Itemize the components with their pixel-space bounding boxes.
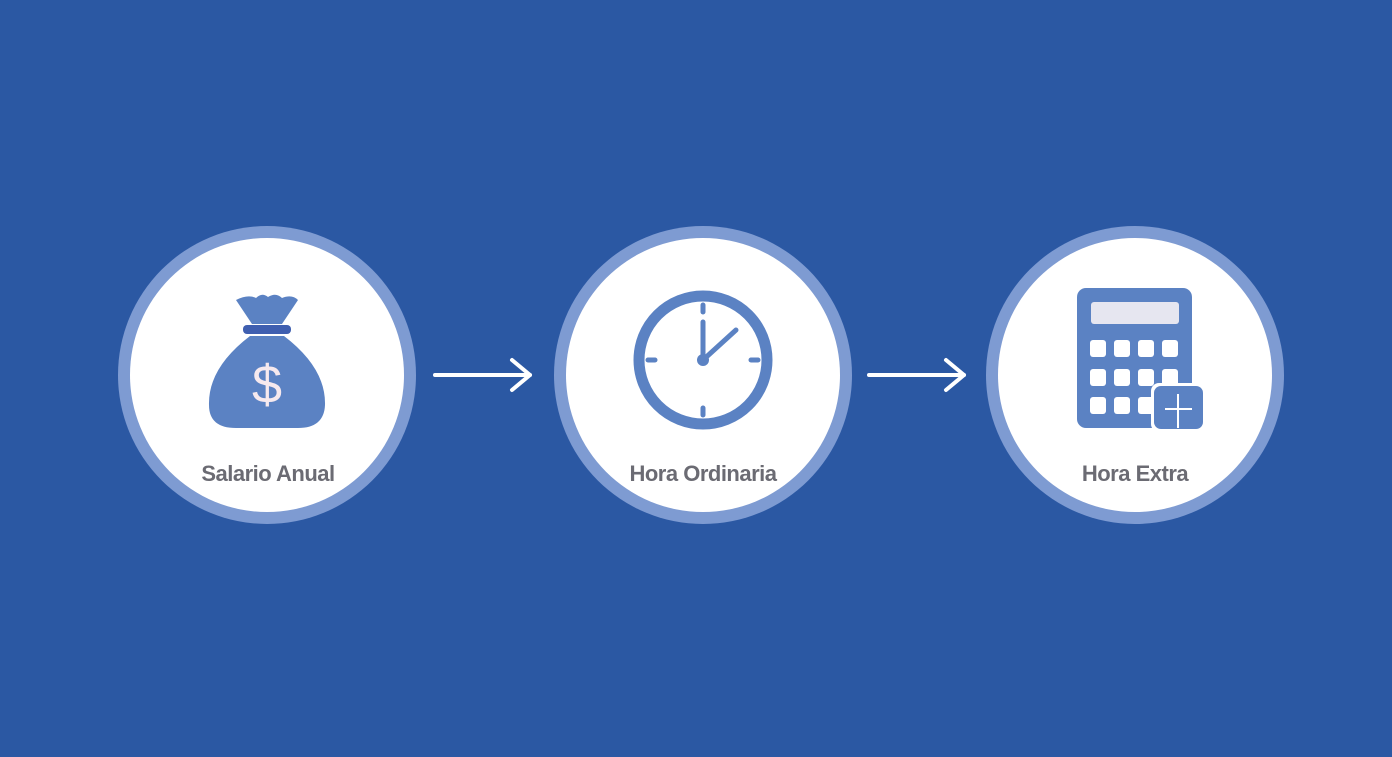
step 3: hora extra — [986, 226, 1284, 524]
label: Salario Anual — [201, 461, 335, 486]
icon: clock — [639, 296, 767, 424]
label: Hora Ordinaria — [629, 461, 778, 486]
icon: money bag: $ — [252, 355, 282, 415]
icon: calculator — [1077, 288, 1206, 432]
icon: money bag — [209, 295, 325, 428]
arrow 1 — [435, 360, 530, 390]
step 2: hora ordinaria — [554, 226, 852, 524]
arrow 2 — [869, 360, 964, 390]
step 1: salario anual — [118, 226, 416, 524]
label: Hora Extra — [1082, 461, 1189, 486]
